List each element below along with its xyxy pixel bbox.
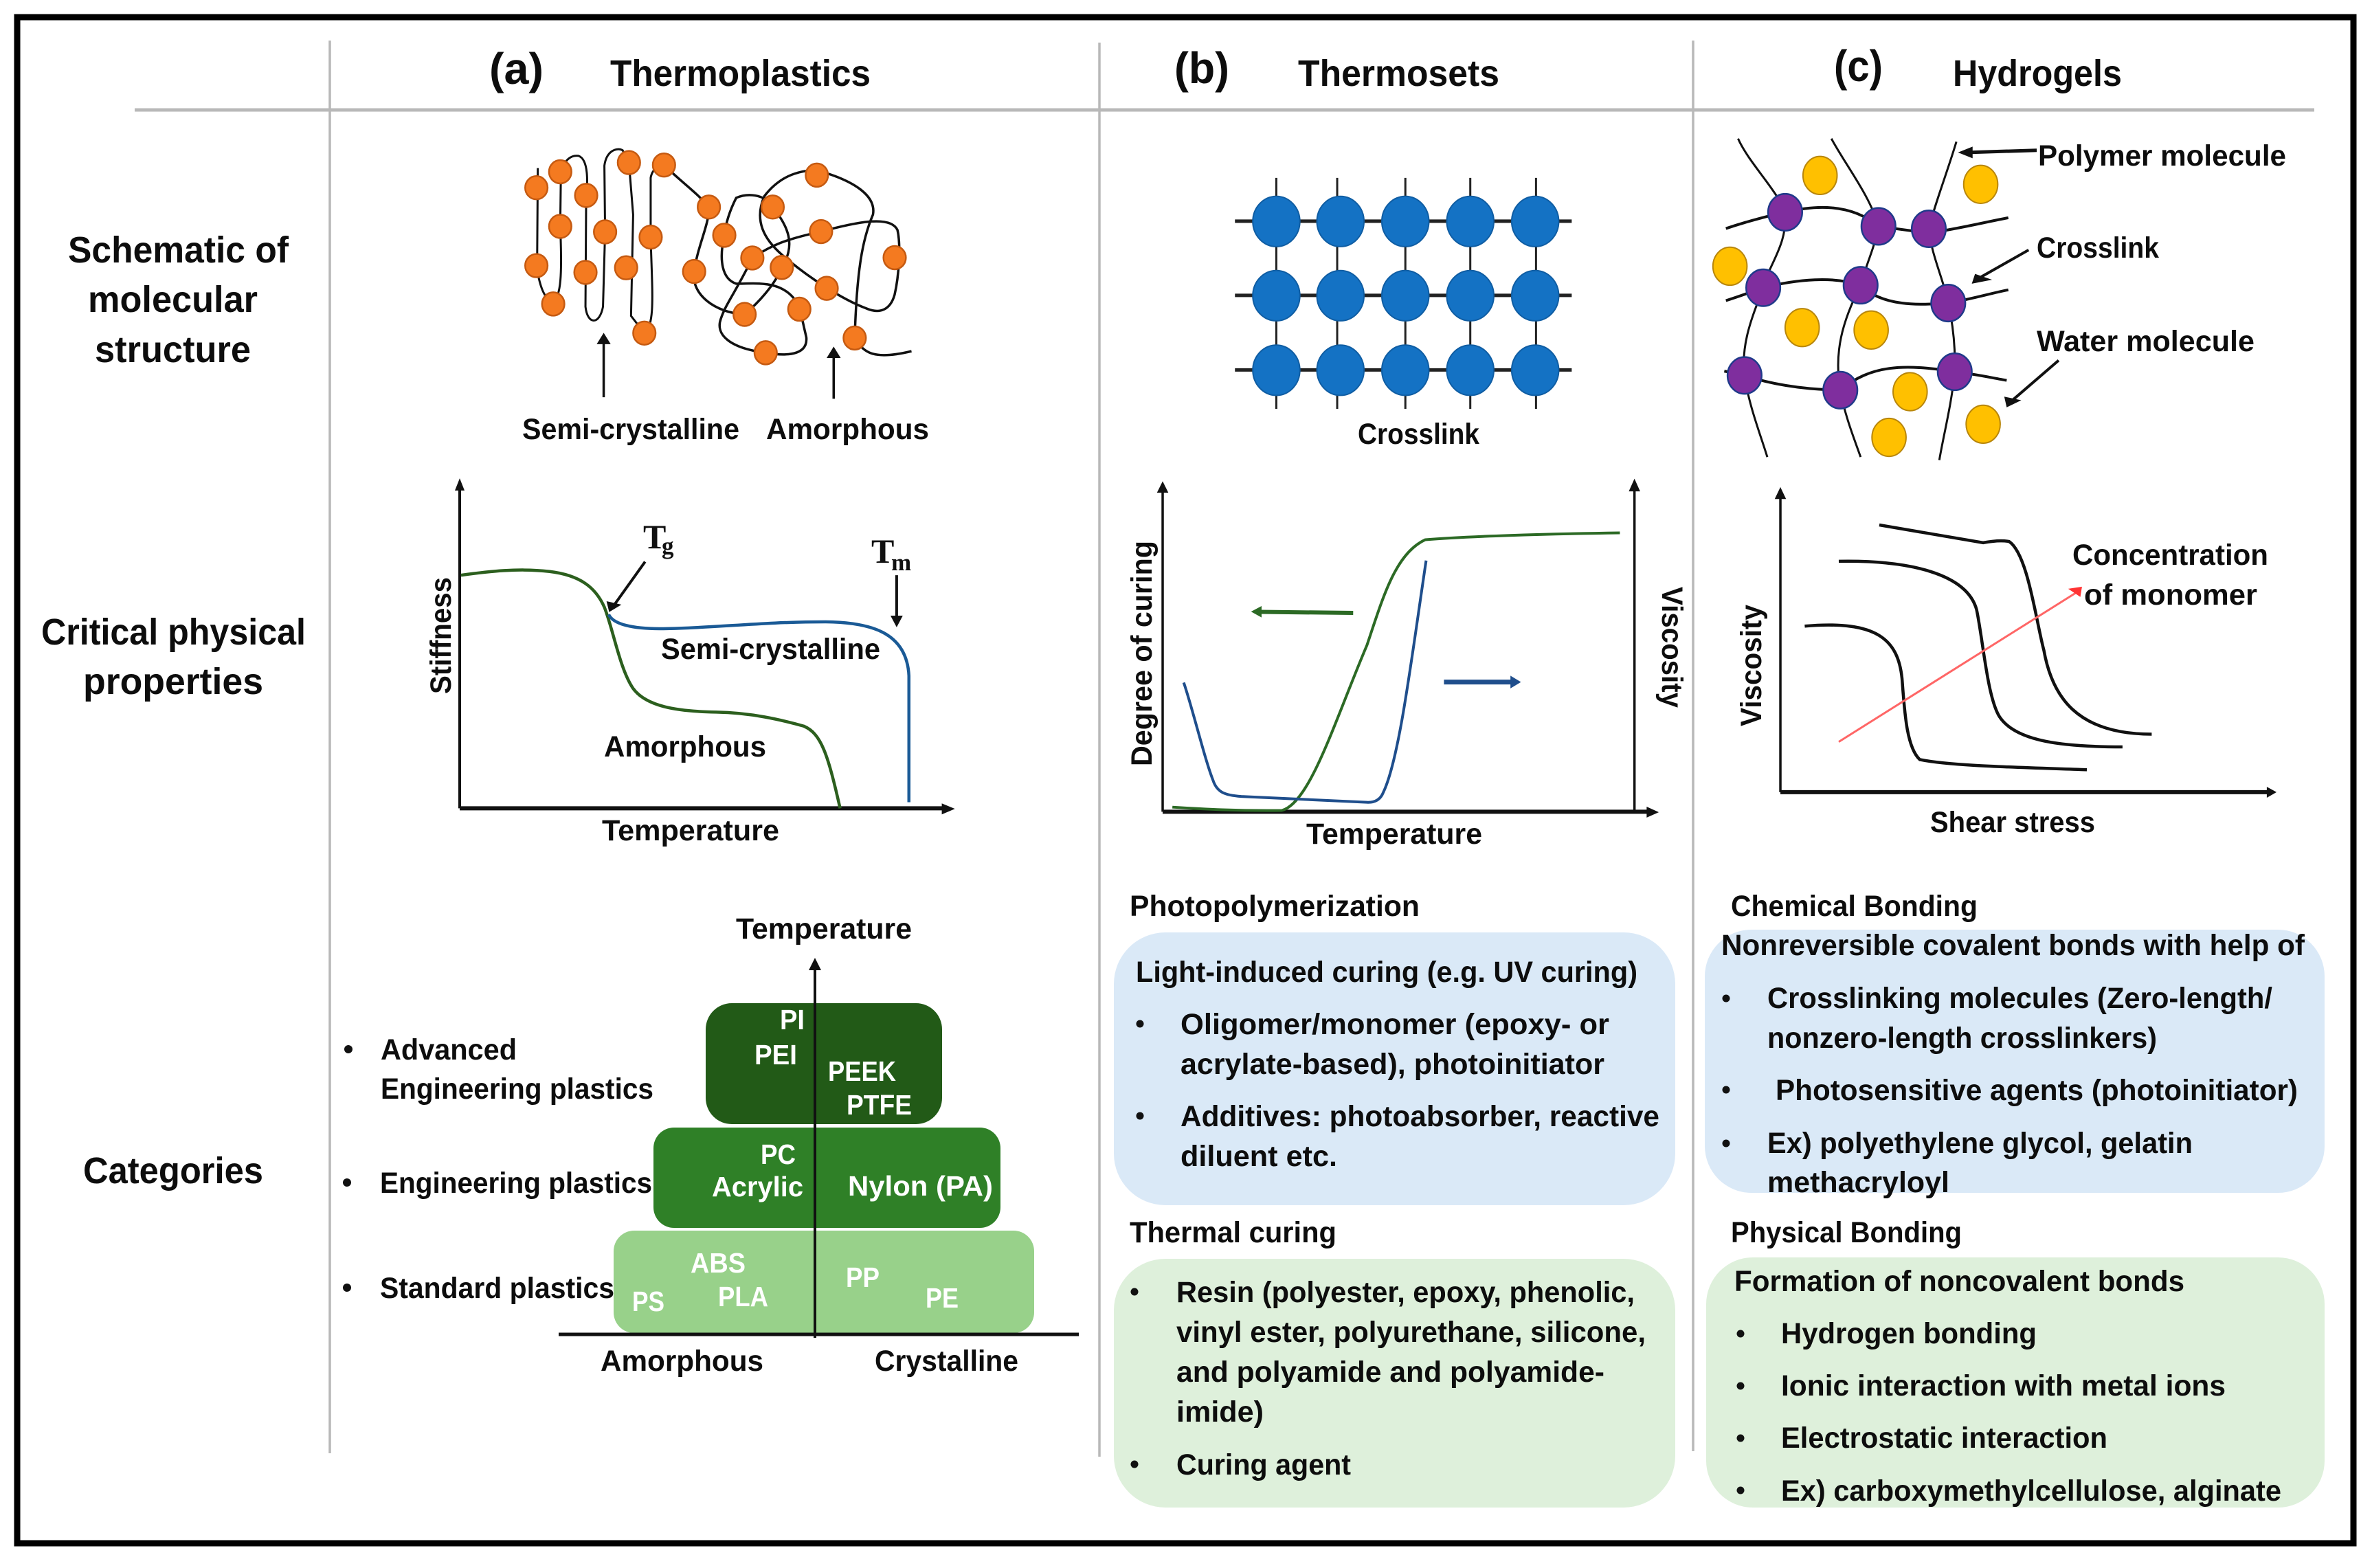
chart: thermoplastic pyramid: Temperature [736, 912, 912, 945]
chart: thermoplastic pyramid: Amorphous [601, 1345, 763, 1378]
panel: photopolymerization: Oligomer/monomer (epoxy- or [1181, 1008, 1609, 1041]
panel: chemical bonding: Photosensitive agents (photoinitiator) [1776, 1074, 2298, 1107]
orange monomer beads [525, 151, 906, 364]
heading: (a) Thermoplastics: Thermoplastics [610, 53, 871, 94]
panel: physical bonding [1706, 1216, 2325, 1508]
tier labels: Standard plastics [380, 1272, 614, 1305]
axes [1775, 487, 2276, 798]
chart: stiffness vs temperature: Semi-crystalline [661, 633, 880, 666]
heading: (b) Thermosets: Thermosets [1298, 53, 1499, 94]
panel: chemical bonding: Nonreversible covalent bonds with help of [1721, 929, 2305, 962]
schematic: thermoset crosslink network [1235, 178, 1571, 451]
schematic: thermoplastic molecular structure: Semi-crystalline [522, 413, 739, 446]
polymer names: PS [632, 1286, 664, 1317]
green box [1114, 1259, 1675, 1508]
chart: degree of curing and viscosity vs temperature [1126, 479, 1688, 851]
panel: chemical bonding: Crosslinking molecules (Zero-length/ [1767, 982, 2272, 1015]
amorphous curve [461, 570, 840, 808]
polymer molecules [1724, 139, 2009, 460]
polymer names: PEEK [828, 1055, 896, 1087]
chart: viscosity vs shear stress: Concentration [2072, 539, 2268, 572]
chart: viscosity vs shear stress: Shear stress [1930, 806, 2095, 839]
blue box [1705, 930, 2325, 1193]
panel: thermal curing: Thermal curing [1130, 1216, 1336, 1249]
tier: engineering plastics [653, 1128, 1000, 1228]
chart: stiffness vs temperature: T [643, 517, 666, 556]
panel: thermal curing: vinyl ester, polyurethane, silicone, [1176, 1316, 1646, 1349]
schematic: thermoset crosslink network: Crosslink [1358, 418, 1479, 451]
row label: schematic of molecular structure: structure [95, 329, 251, 370]
polymer names: PC [761, 1139, 796, 1170]
polymer names: PE [926, 1282, 959, 1314]
direction arrows [1260, 612, 1353, 613]
heading: (a) Thermoplastics: (a) [489, 44, 544, 93]
polymer names: PEI [754, 1039, 797, 1071]
schematic: hydrogel network: Crosslink [2037, 232, 2159, 265]
panel: thermal curing: Resin (polyester, epoxy, phenolic, [1176, 1276, 1635, 1309]
row label: critical physical properties: properties [83, 661, 263, 702]
panel: photopolymerization: Additives: photoabsorber, reactive [1181, 1100, 1659, 1133]
panel: thermal curing: Curing agent [1176, 1448, 1351, 1481]
panel: physical bonding: Physical Bonding [1731, 1216, 1962, 1249]
chart: stiffness vs temperature: Temperature [602, 814, 779, 847]
axes [455, 478, 955, 814]
blue crosslink nodes [1253, 197, 1558, 395]
heading: (c) Hydrogels [1834, 41, 2122, 94]
panel: physical bonding: Hydrogen bonding [1781, 1317, 2037, 1350]
chart: degree of curing and viscosity vs temperature: Degree of curing [1126, 541, 1159, 766]
schematic: hydrogel network: Polymer molecule [2038, 139, 2286, 172]
polymer names: ABS [691, 1247, 746, 1279]
chart: stiffness vs temperature [425, 478, 955, 847]
panel: photopolymerization [1114, 890, 1675, 1205]
panel: thermal curing: imide) [1176, 1396, 1264, 1429]
panel: chemical bonding: Ex) polyethylene glycol, gelatin [1767, 1127, 2193, 1160]
purple crosslinks [1727, 194, 1972, 409]
viscosity curve [1184, 561, 1426, 803]
Tg and Tm arrows [607, 561, 903, 627]
panel: photopolymerization: diluent etc. [1181, 1140, 1337, 1173]
polymer chains [537, 149, 912, 355]
panel: chemical bonding [1705, 890, 2325, 1199]
panel: physical bonding: Formation of noncovalent bonds [1734, 1265, 2184, 1298]
polymer names: PP [846, 1262, 880, 1293]
chart: viscosity vs shear stress: of monomer [2084, 579, 2257, 612]
heading: (a) Thermoplastics [489, 44, 871, 94]
chart: stiffness vs temperature: g [662, 533, 674, 559]
tier: standard plastics [614, 1231, 1034, 1333]
panel: photopolymerization: acrylate-based), photoinitiator [1181, 1048, 1604, 1081]
chart: viscosity vs shear stress: Viscosity [1735, 605, 1768, 726]
row label: categories: Categories [83, 1150, 263, 1191]
network lines [1235, 178, 1571, 409]
heading: (b) Thermosets: (b) [1174, 43, 1229, 93]
heading: (b) Thermosets [1174, 43, 1499, 94]
tier: advanced engineering plastics [706, 1003, 942, 1124]
axes [1157, 479, 1659, 818]
red concentration arrow [1839, 593, 2075, 742]
semi-crystalline curve [609, 614, 909, 802]
shear-thinning curves [1804, 525, 2151, 770]
arrows to structure labels [596, 333, 840, 399]
row label: schematic of molecular structure: molecular [88, 279, 258, 320]
polymer names: PLA [718, 1281, 768, 1312]
chart: thermoplastic pyramid [343, 912, 1079, 1378]
panel: thermal curing [1114, 1216, 1675, 1508]
polymer names: PTFE [847, 1089, 912, 1121]
polymer names: Nylon (PA) [848, 1170, 993, 1202]
chart: stiffness vs temperature: Amorphous [604, 730, 766, 763]
schematic: thermoplastic molecular structure [522, 149, 929, 446]
polymer names: PI [780, 1004, 805, 1035]
panel: physical bonding: Ionic interaction with metal ions [1781, 1369, 2226, 1402]
panel: physical bonding: Ex) carboxymethylcellulose, alginate [1781, 1475, 2281, 1508]
heading: (c) Hydrogels: (c) [1834, 41, 1883, 91]
blue box [1114, 932, 1675, 1205]
chart: stiffness vs temperature: m [891, 549, 911, 576]
chart: stiffness vs temperature: Stiffness [425, 577, 458, 694]
chart: thermoplastic pyramid: Crystalline [875, 1345, 1018, 1378]
row label: schematic of molecular structure: Schematic of [68, 229, 289, 271]
tier labels [343, 1033, 653, 1305]
schematic: hydrogel network: Water molecule [2037, 325, 2254, 358]
chart: degree of curing and viscosity vs temperature: Temperature [1306, 818, 1482, 851]
panel: chemical bonding: nonzero-length crosslinkers) [1767, 1022, 2157, 1055]
green box [1706, 1257, 2325, 1508]
row label: critical physical properties [41, 612, 306, 702]
chart: degree of curing and viscosity vs temperature: Viscosity [1655, 587, 1688, 708]
curing curve [1172, 533, 1620, 811]
row label: schematic of molecular structure [68, 229, 289, 370]
chart: viscosity vs shear stress [1735, 487, 2276, 839]
water molecules [1713, 157, 2000, 456]
panel: photopolymerization: Photopolymerization [1130, 890, 1420, 923]
panel: thermal curing: and polyamide and polyamide- [1176, 1356, 1604, 1389]
polymer names: Acrylic [712, 1171, 803, 1202]
panel: chemical bonding: methacryloyl [1767, 1166, 1949, 1199]
row label: critical physical properties: Critical physical [41, 612, 306, 653]
schematic: hydrogel network [1713, 139, 2286, 460]
panel: physical bonding: Electrostatic interaction [1781, 1422, 2107, 1455]
chart: stiffness vs temperature: T [871, 532, 894, 570]
panel: chemical bonding: Chemical Bonding [1731, 890, 1978, 923]
tier labels: Advanced [381, 1033, 517, 1066]
panel: photopolymerization: Light-induced curing (e.g. UV curing) [1136, 956, 1637, 989]
polymer names [632, 1004, 993, 1317]
axes [559, 958, 1079, 1338]
schematic: thermoplastic molecular structure: Amorphous [766, 413, 929, 446]
tier labels: Engineering plastics [380, 1167, 652, 1200]
callout arrows [1958, 146, 2059, 407]
tier labels: Engineering plastics [381, 1073, 653, 1106]
heading: (c) Hydrogels: Hydrogels [1953, 53, 2122, 94]
